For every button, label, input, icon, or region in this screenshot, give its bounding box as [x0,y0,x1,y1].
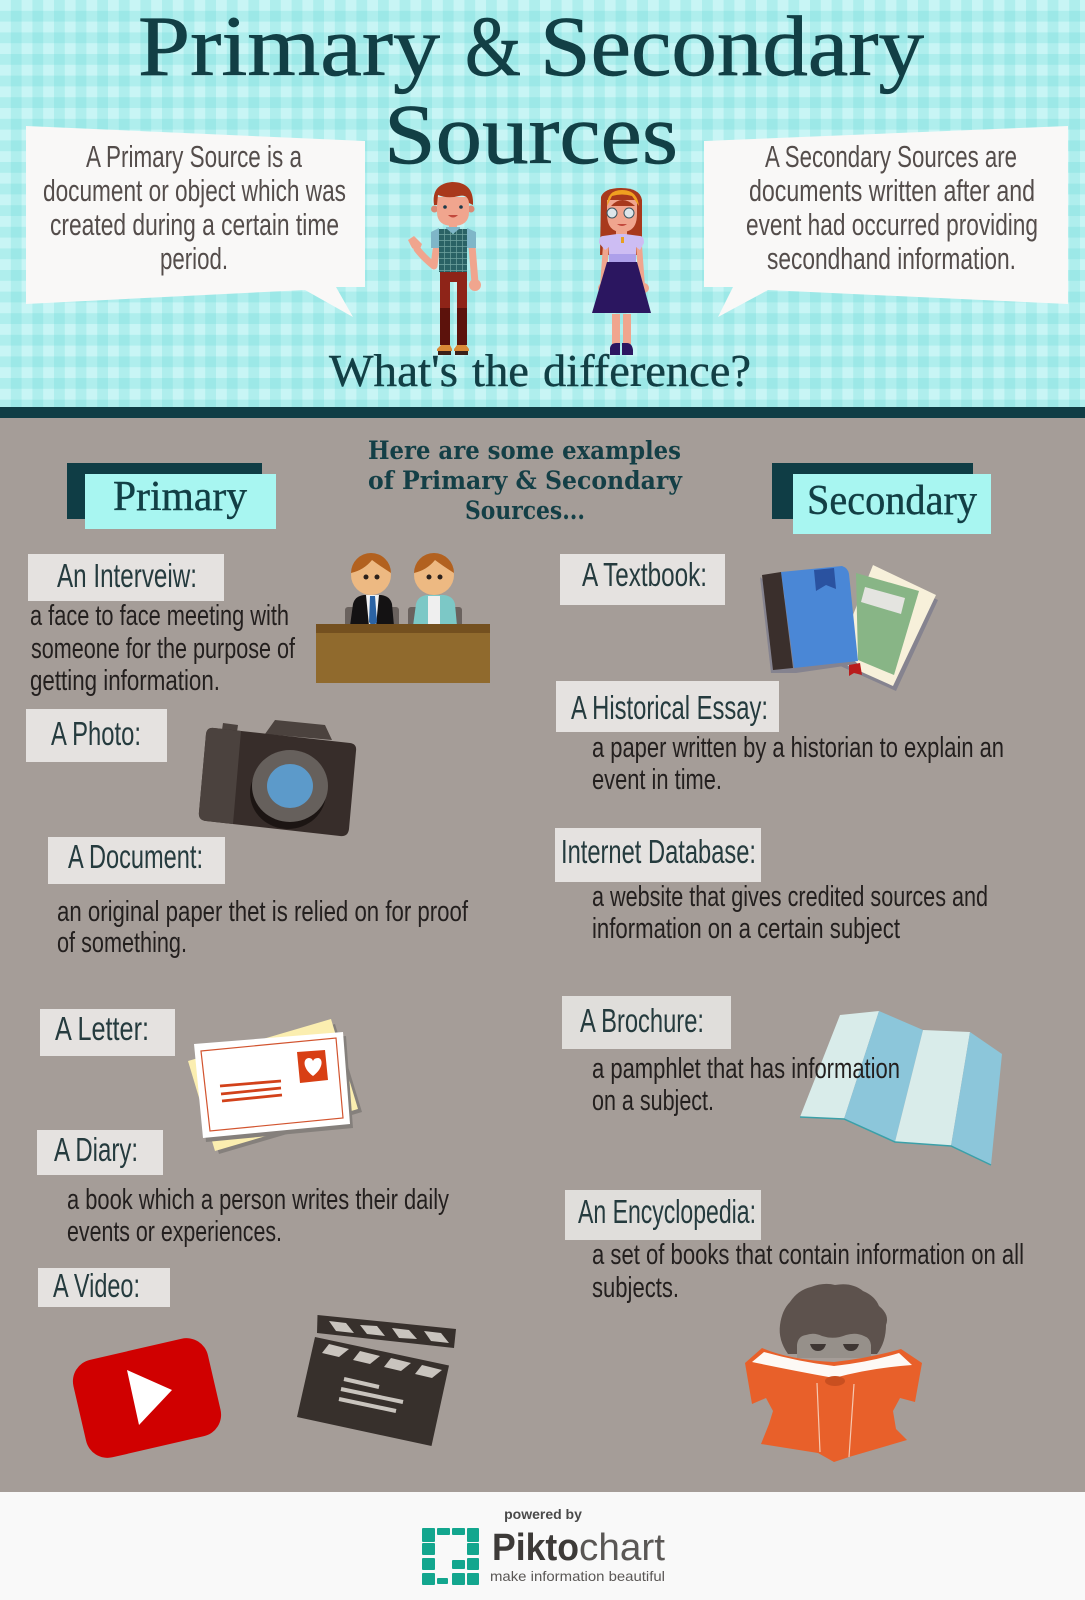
label: a document [48,837,225,884]
heading: here are some examples: Here are some examples [368,436,681,465]
icon: film clapperboard [297,1315,456,1446]
icon: letter envelopes [188,1019,362,1154]
label: a historical essay [556,681,779,732]
icon: video play button [69,1334,225,1462]
label: a diary [37,1130,163,1175]
label: a letter: A Letter: [55,1010,149,1047]
heading: here are some examples [368,436,683,525]
label: a brochure: A Brochure: [580,1002,704,1039]
text: diary definition: events or experiences. [67,1216,282,1248]
label: a letter [40,1009,175,1056]
text: diary definition: a book which a person writes their daily [67,1184,449,1216]
label: internet database: Internet Database: [561,833,756,870]
title: Secondary [540,0,924,94]
label: an encyclopedia: An Encyclopedia: [578,1193,756,1230]
icon: two people at a desk [316,553,490,683]
footer: piktochart wordmark: Pikto [492,1527,579,1569]
icon: piktochart logo [422,1528,479,1585]
label: a document: A Document: [68,838,203,875]
title: & [465,0,521,94]
text: brochure definition: on a subject. [592,1085,714,1117]
callout: secondary source definition [704,126,1068,317]
footer: piktochart wordmark [490,1527,665,1584]
text: brochure definition [592,1053,900,1117]
title: Primary [138,0,440,94]
label: a video: A Video: [53,1267,140,1304]
text: document definition [57,896,469,959]
heading tag: primary: Primary [113,474,247,520]
title [138,0,924,182]
icon: stack of books [760,565,938,691]
subheading: what's the difference: What's [329,345,458,396]
text: diary definition [67,1184,449,1248]
icon: girl character [592,188,651,355]
label: internet database [555,828,761,882]
footer: powered by: powered by [504,1506,582,1522]
heading tag: primary [67,463,276,529]
heading tag: secondary [772,463,991,534]
label: a diary: A Diary: [54,1131,138,1168]
text: interview definition: getting information. [30,665,220,697]
icon: folded brochure [800,1011,1002,1165]
text: encyclopedia definition [592,1239,1024,1304]
text: document definition: of something. [57,927,187,959]
text: historical essay definition: event in time. [592,764,722,796]
text: internet database definition: information on a certain subject [592,913,900,945]
heading: here are some examples: of Primary & Secondary [368,466,683,495]
callout: primary source definition: period. [160,241,228,276]
label: an encyclopedia [565,1190,761,1240]
footer: piktochart wordmark: make information beautiful [490,1568,665,1584]
text: internet database definition [592,881,988,945]
text: historical essay definition [592,732,1004,796]
callout: primary source definition [26,126,365,317]
text: interview definition [30,600,296,697]
panel: footer [0,1492,1085,1600]
callout: primary source definition: created during a certain time [50,207,339,242]
label: a textbook [560,554,725,605]
text: document definition: an original paper thet is relied on for proof [57,896,469,928]
footer: piktochart wordmark: chart [579,1527,665,1569]
header divider bar [0,407,1085,418]
icon: boy character [408,182,481,355]
subheading: what's the difference: the [472,345,529,396]
icon: person reading a book [745,1284,922,1462]
panel: gingham header [0,0,1085,407]
subheading: what's the difference: difference? [543,345,751,396]
text: encyclopedia definition: subjects. [592,1272,679,1304]
text: interview definition: someone for the purpose of [31,633,296,665]
callout: primary source definition: A Primary Source is a [86,139,303,174]
icon: camera [199,720,356,836]
label: a textbook: A Textbook: [582,556,707,593]
label: a brochure [562,996,731,1049]
label: an interview: An Interveiw: [57,557,197,594]
label: a photo [26,709,167,762]
subheading: what's the difference [329,345,751,396]
heading tag: secondary: Secondary [807,478,977,524]
text: interview definition: a face to face meeting with [30,600,289,632]
label: a photo: A Photo: [51,715,141,752]
panel: grey examples area [0,418,1085,1492]
callout: primary source definition: document or object which was [43,173,346,208]
title: Sources [384,86,678,182]
label: an interview [28,554,224,601]
text: brochure definition: a pamphlet that has information [592,1053,900,1085]
label: a historical essay: A Historical Essay: [571,689,768,726]
heading: here are some examples: Sources... [465,496,585,525]
